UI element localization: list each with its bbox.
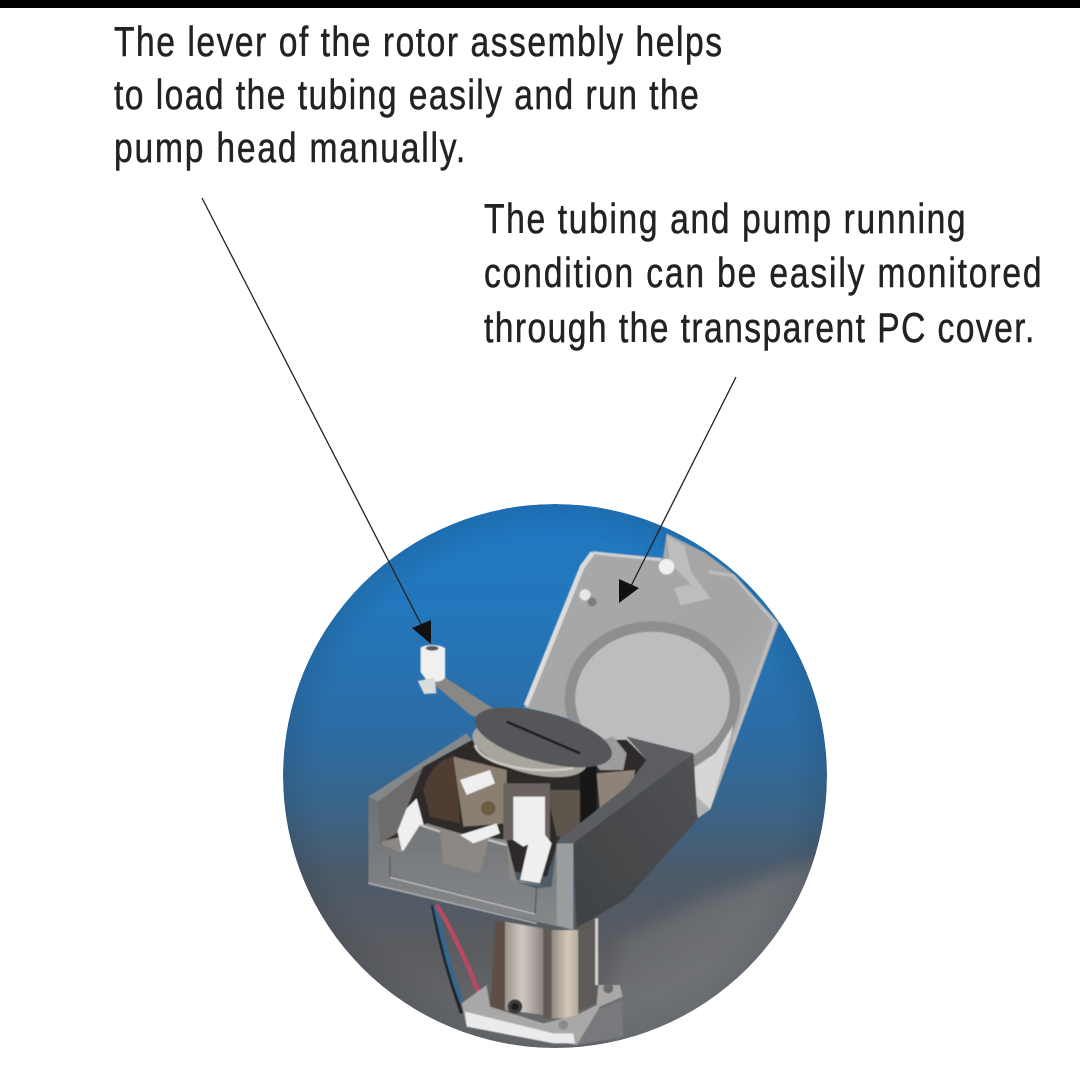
callout text: lever of the rotor assembly bbox=[114, 20, 722, 172]
lever handle bbox=[418, 645, 505, 725]
housing front panel bbox=[368, 797, 573, 930]
mounting base bbox=[462, 983, 623, 1045]
arrow: lever pointer bbox=[202, 198, 431, 644]
motor post, wires and base bbox=[433, 905, 623, 1045]
housing back and right wall bbox=[557, 737, 693, 843]
rotor disc bbox=[472, 706, 628, 778]
motor post bbox=[490, 918, 597, 1018]
wires bbox=[433, 905, 478, 1013]
white rollers bbox=[395, 770, 552, 883]
floor highlight bbox=[598, 853, 816, 1044]
top black bar bbox=[0, 0, 1080, 8]
callout text: lever of the rotor assembly: pump head manually. bbox=[114, 126, 465, 172]
pump cover lid bbox=[524, 533, 779, 818]
callout text: transparent PC cover: The tubing and pump running bbox=[484, 197, 966, 243]
callout text: transparent PC cover bbox=[484, 197, 1042, 352]
callout text: lever of the rotor assembly: to load the tubing easily and run the bbox=[114, 73, 699, 119]
callout text: transparent PC cover: condition can be easily monitored bbox=[484, 251, 1042, 297]
housing, rotor and rollers bbox=[368, 695, 697, 930]
pump head photo illustration in circle bbox=[283, 504, 840, 1050]
callout text: lever of the rotor assembly: The lever of the rotor assembly helps bbox=[114, 20, 722, 66]
housing left rim bbox=[368, 733, 472, 802]
housing interior bbox=[380, 740, 647, 877]
arrow: cover pointer bbox=[619, 377, 736, 603]
callout text: transparent PC cover: through the transparent PC cover. bbox=[484, 306, 1034, 352]
